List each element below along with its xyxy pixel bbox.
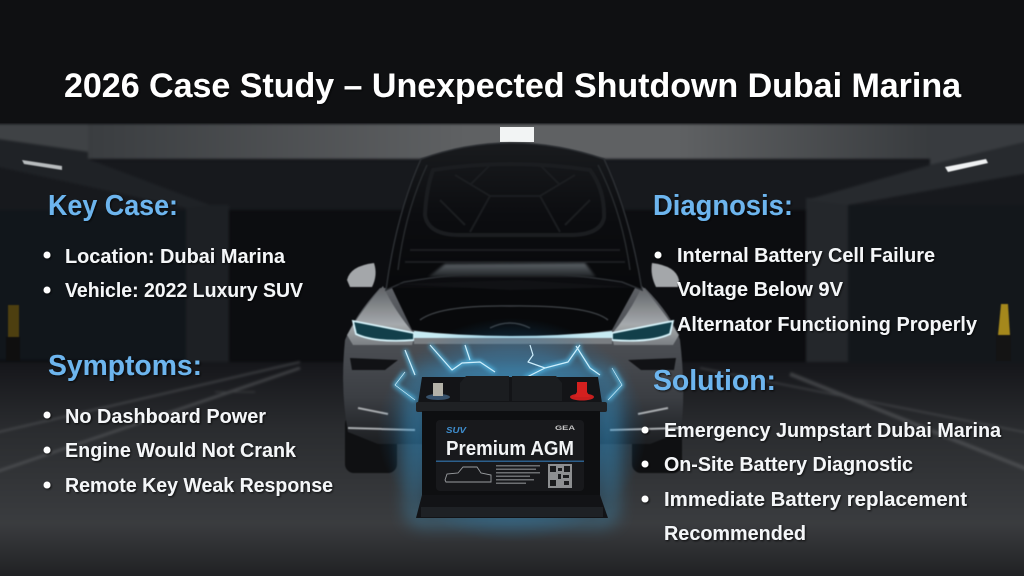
label divider [436,460,584,462]
headlights [353,321,673,341]
ceiling light: right [945,159,988,172]
list: solution: Recommended [664,523,806,545]
list: diagnosis: Internal Battery Cell Failure [677,245,935,267]
battery case [422,411,600,507]
panel: diagnosis [653,190,978,336]
car [343,143,683,473]
panel: solution [642,365,1002,545]
title: 2026 Case Study – Unexpected Shutdown Dubai Marina [64,67,962,105]
engine details [420,306,608,328]
panel: symptoms [44,350,333,497]
QR code [548,464,572,488]
front lower vents [350,358,676,370]
cell covers [460,376,562,401]
list: symptoms: No Dashboard Power [65,406,266,428]
list: symptoms: Remote Key Weak Response [65,475,333,497]
hood rim [398,165,630,270]
heading: key case: Key Case: [48,190,178,222]
list: diagnosis: Alternator Functioning Properly [677,314,978,336]
list: diagnosis: Voltage Below 9V [677,279,844,301]
mirror: left [347,263,376,287]
list: symptoms [44,406,333,497]
panel: key case [44,190,304,302]
battery glow [377,318,647,542]
floor lane lines [0,362,1024,474]
list: diagnosis [654,245,978,336]
bollard: right [996,304,1011,361]
list: key case [44,246,304,302]
bollard: left [6,305,20,361]
fine print [496,465,540,484]
lower trim [348,408,680,430]
tyres [345,415,682,473]
list: symptoms: Engine Would Not Crank [65,440,297,462]
negative terminal [426,383,450,400]
ceiling light: centre [500,127,534,142]
car sketch [445,467,491,482]
heading: diagnosis: Diagnosis: [653,190,793,222]
battery base [416,495,608,518]
top title band [0,0,1024,123]
label panel [436,420,584,491]
cert marks: GEA [555,426,576,432]
heading: solution: Solution: [653,365,776,397]
windshield reflection [428,263,596,277]
light bar [414,331,612,338]
fenders [347,286,679,345]
list: solution: Emergency Jumpstart Dubai Marina [664,420,1002,442]
mirror: right [652,263,679,287]
list: solution: Immediate Battery replacement [664,489,967,511]
battery [416,376,608,518]
list: key case: Location: Dubai Marina [65,246,286,268]
list: key case: Vehicle: 2022 Luxury SUV [65,280,304,302]
brand mark: SUV [446,426,467,435]
battery name: Premium AGM [446,437,574,460]
base rim [421,507,603,517]
wiper [395,280,630,290]
engine bay [392,288,635,338]
positive terminal [570,382,594,400]
heading: symptoms: Symptoms: [48,350,202,382]
battery lid [418,377,602,403]
open hood [386,143,642,290]
ceiling light: left [22,160,62,170]
list: solution [642,420,1002,545]
car body [343,288,683,444]
list: solution: On-Site Battery Diagnostic [664,454,913,476]
hood inner panel [405,164,625,262]
battery top ledge [416,402,607,412]
lightning [395,345,622,400]
front strip [414,338,612,344]
